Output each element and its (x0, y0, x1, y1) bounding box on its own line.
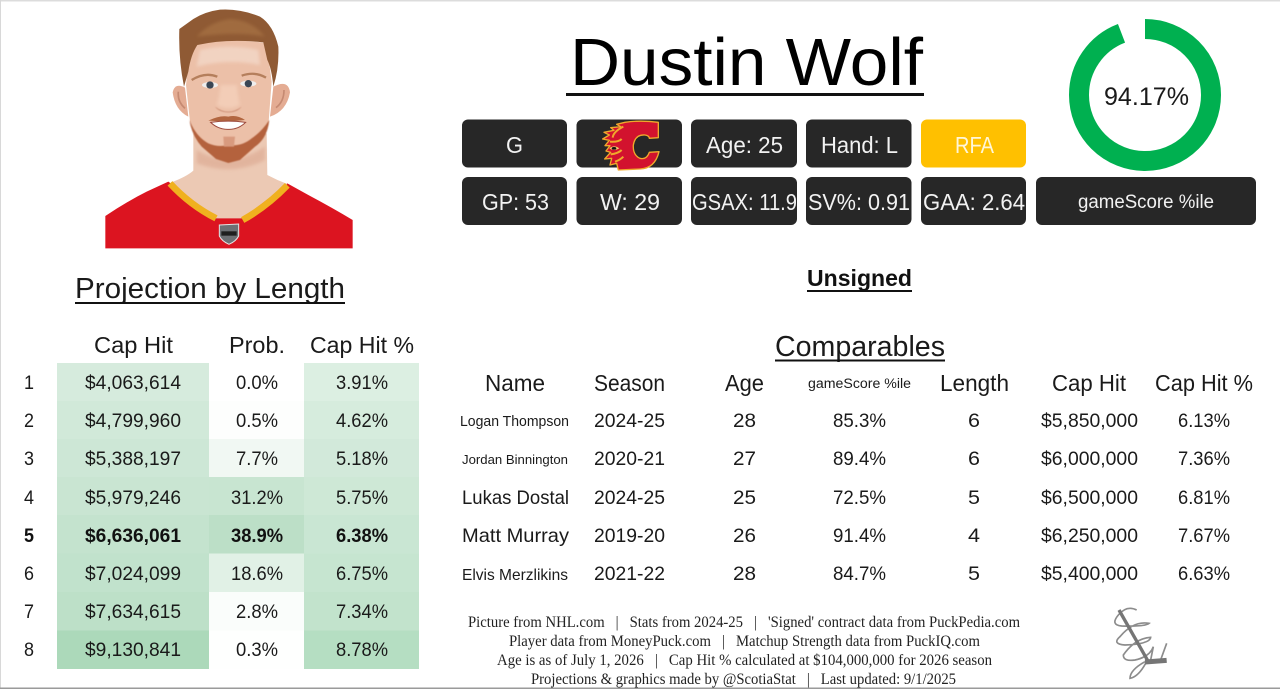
row 2: 4.62% (336, 410, 388, 432)
comparable: Elvis Merzlikins: Elvis Merzlikins (462, 567, 568, 584)
row 4: 5.75% (336, 487, 388, 509)
row 5 highlighted: 6.38% (336, 525, 388, 547)
comparable: Matt Murray: $6,250,000 (1041, 525, 1138, 547)
comparable: Lukas Dostal: 6.81% (1178, 487, 1230, 509)
head (173, 9, 290, 163)
row 8: 0.3% (236, 639, 278, 661)
comparable: Logan Thompson: 6.13% (1178, 410, 1230, 432)
badge: hand (806, 120, 912, 168)
projection column headers: Cap Hit % (310, 332, 414, 358)
comparable: Matt Murray: 7.67% (1178, 525, 1230, 547)
comparable: Elvis Merzlikins: 6.63% (1178, 563, 1230, 585)
row 6 (24, 563, 388, 585)
comparable: Matt Murray: 4 (968, 525, 980, 547)
row 6: 18.6% (231, 563, 283, 585)
comparable: Jordan Binnington: 7.36% (1178, 448, 1230, 470)
comparable: Logan Thompson: 85.3% (833, 410, 886, 432)
jersey (105, 182, 353, 248)
projection column headers (94, 332, 414, 358)
badge: GP (462, 177, 567, 225)
comparable: Jordan Binnington: 27 (733, 448, 756, 470)
comparable: Jordan Binnington (462, 448, 1230, 470)
comparable: Jordan Binnington: 6 (968, 448, 980, 470)
row 6: 6 (24, 563, 34, 585)
badge: GAA: GAA: 2.64 (923, 189, 1025, 215)
donut gauge: gameScore percentile: 94.17% (1104, 83, 1189, 111)
cap hit column shading (57, 363, 209, 669)
moustache (208, 116, 245, 122)
row 8 (24, 639, 388, 661)
footer credits: Projections & graphics made by @ScotiaStat | Last updated: 9/1/2025 (531, 671, 956, 688)
row 4: 4 (24, 487, 34, 509)
status: unsigned: Unsigned (807, 265, 912, 291)
row 3: 7.7% (236, 448, 278, 470)
comparable: Elvis Merzlikins: 84.7% (833, 563, 886, 585)
badge: W: W: 29 (600, 189, 660, 215)
comparable: Logan Thompson: $5,850,000 (1041, 410, 1138, 432)
NHL shield (219, 224, 239, 244)
badge: position (462, 120, 567, 168)
row 7 (24, 601, 388, 623)
row 2: 0.5% (236, 410, 278, 432)
footer credits: Age is as of July 1, 2026 | Cap Hit % calculated at $104,000,000 for 2026 season (497, 652, 992, 669)
ears (173, 86, 188, 117)
row 1 (24, 372, 388, 394)
comparable: Lukas Dostal: 72.5% (833, 487, 886, 509)
badge: W (576, 177, 682, 225)
badge: gameScore percentile label: gameScore %ile (1078, 192, 1214, 213)
nose (215, 107, 242, 112)
footer credits: Picture from NHL.com | Stats from 2024-25 | 'Signed' contract data from PuckPedia.com (468, 614, 1020, 631)
row 5 highlighted: 38.9% (231, 525, 283, 547)
mouth (211, 121, 246, 129)
row 7: 7 (24, 601, 34, 623)
neck (171, 133, 287, 218)
probability column shading (209, 363, 304, 669)
footer credits: Player data from MoneyPuck.com | Matchup Strength data from PuckIQ.com (509, 633, 980, 650)
badge: team logo (576, 120, 682, 170)
badge: RFA (921, 120, 1026, 168)
eyes (202, 82, 218, 88)
comparable: Jordan Binnington: 89.4% (833, 448, 886, 470)
comparable: Matt Murray (462, 525, 1230, 547)
comparable: Logan Thompson: Logan Thompson (460, 414, 569, 430)
heading: comparables: Comparables (775, 331, 945, 363)
title: player name: Dustin Wolf (570, 25, 923, 100)
comparables table (460, 370, 1253, 585)
comparables column headers: Name (485, 370, 545, 396)
row 6: $7,024,099 (85, 563, 181, 585)
comparable: Elvis Merzlikins: 2021-22 (594, 563, 665, 585)
comparable: Matt Murray: 26 (733, 525, 756, 547)
row 2: 2 (24, 410, 34, 432)
row 7: 7.34% (336, 601, 388, 623)
comparables column headers: Length (940, 370, 1009, 396)
comparable: Matt Murray: 2019-20 (594, 525, 665, 547)
badge: GSAX: GSAX: 11.9 (692, 189, 797, 215)
comparable: Jordan Binnington: $6,000,000 (1041, 448, 1138, 470)
face (186, 40, 272, 162)
row 8: 8.78% (336, 639, 388, 661)
icon: flames logo (603, 121, 659, 170)
badge: hand: Hand: L (821, 132, 898, 158)
row 8: $9,130,841 (85, 639, 181, 661)
comparable: Logan Thompson: 2024-25 (594, 410, 665, 432)
row 2: $4,799,960 (85, 410, 181, 432)
row 4 (24, 487, 388, 509)
comparables column headers: gameScore %ile (808, 376, 911, 391)
comparable: Elvis Merzlikins: 5 (968, 563, 980, 585)
comparable: Lukas Dostal (462, 487, 1230, 509)
row 2 (24, 410, 388, 432)
comparable: Logan Thompson: 28 (733, 410, 756, 432)
comparables column headers: Cap Hit % (1155, 370, 1253, 396)
comparable: Elvis Merzlikins: 28 (733, 563, 756, 585)
hair (179, 9, 278, 87)
badge: position: G (506, 132, 523, 158)
beard (189, 120, 269, 163)
comparable: Elvis Merzlikins: $5,400,000 (1041, 563, 1138, 585)
badge: gameScore percentile label (1036, 177, 1256, 225)
comparable: Lukas Dostal: Lukas Dostal (462, 487, 569, 509)
collar (170, 183, 287, 220)
row 7: $7,634,615 (85, 601, 181, 623)
comparable: Jordan Binnington: Jordan Binnington (462, 452, 568, 467)
comparable: Logan Thompson (460, 410, 1230, 432)
row 5 highlighted: 5 (24, 525, 34, 547)
projection column headers: Cap Hit (94, 332, 174, 358)
info badges row 1 (462, 120, 1026, 170)
row 4: $5,979,246 (85, 487, 181, 509)
comparable: Lukas Dostal: 25 (733, 487, 756, 509)
badge: GP: GP: 53 (482, 189, 549, 215)
row 5 highlighted (24, 525, 388, 547)
comparable: Jordan Binnington: 2020-21 (594, 448, 665, 470)
brows (192, 74, 266, 80)
row 3: 3 (24, 448, 34, 470)
stat badges row 2 (462, 177, 1256, 225)
row 6: 6.75% (336, 563, 388, 585)
comparable: Elvis Merzlikins (462, 563, 1230, 585)
comparables column headers (485, 370, 1253, 396)
comparable: Matt Murray: 91.4% (833, 525, 886, 547)
badge: age: Age: 25 (706, 132, 783, 158)
comparable: Matt Murray: Matt Murray (462, 525, 569, 547)
donut gauge: gameScore percentile (1079, 29, 1211, 161)
signature (1115, 608, 1167, 678)
footer credits (468, 614, 1020, 688)
row 1: 0.0% (236, 372, 278, 394)
row 1: 3.91% (336, 372, 388, 394)
badge: GSAX (691, 177, 797, 225)
badge: RFA: RFA (955, 132, 995, 158)
row 8: 8 (24, 639, 34, 661)
heading: projection by length: Projection by Length (75, 273, 345, 305)
player photo (105, 9, 353, 248)
badge: SV% (806, 177, 912, 225)
comparable: Logan Thompson: 6 (968, 410, 980, 432)
row 3: 5.18% (336, 448, 388, 470)
row 3 (24, 448, 388, 470)
projection column headers: Prob. (229, 332, 285, 358)
comparables column headers: Age (725, 370, 764, 396)
projection table (24, 332, 419, 669)
row 1: 1 (24, 372, 34, 394)
row 4: 31.2% (231, 487, 283, 509)
badge: SV%: SV%: 0.91 (808, 189, 910, 215)
row 3: $5,388,197 (85, 448, 181, 470)
comparable: Lukas Dostal: 5 (968, 487, 980, 509)
row 1: $4,063,614 (85, 372, 181, 394)
row 5 highlighted: $6,636,061 (85, 525, 181, 547)
comparable: Lukas Dostal: 2024-25 (594, 487, 665, 509)
comparables column headers: Cap Hit (1052, 370, 1127, 396)
comparable: Lukas Dostal: $6,500,000 (1041, 487, 1138, 509)
badge: age (691, 120, 797, 168)
row 7: 2.8% (236, 601, 278, 623)
comparables column headers: Season (594, 370, 665, 396)
cap hit percent column shading (304, 363, 419, 669)
badge: GAA (921, 177, 1026, 225)
